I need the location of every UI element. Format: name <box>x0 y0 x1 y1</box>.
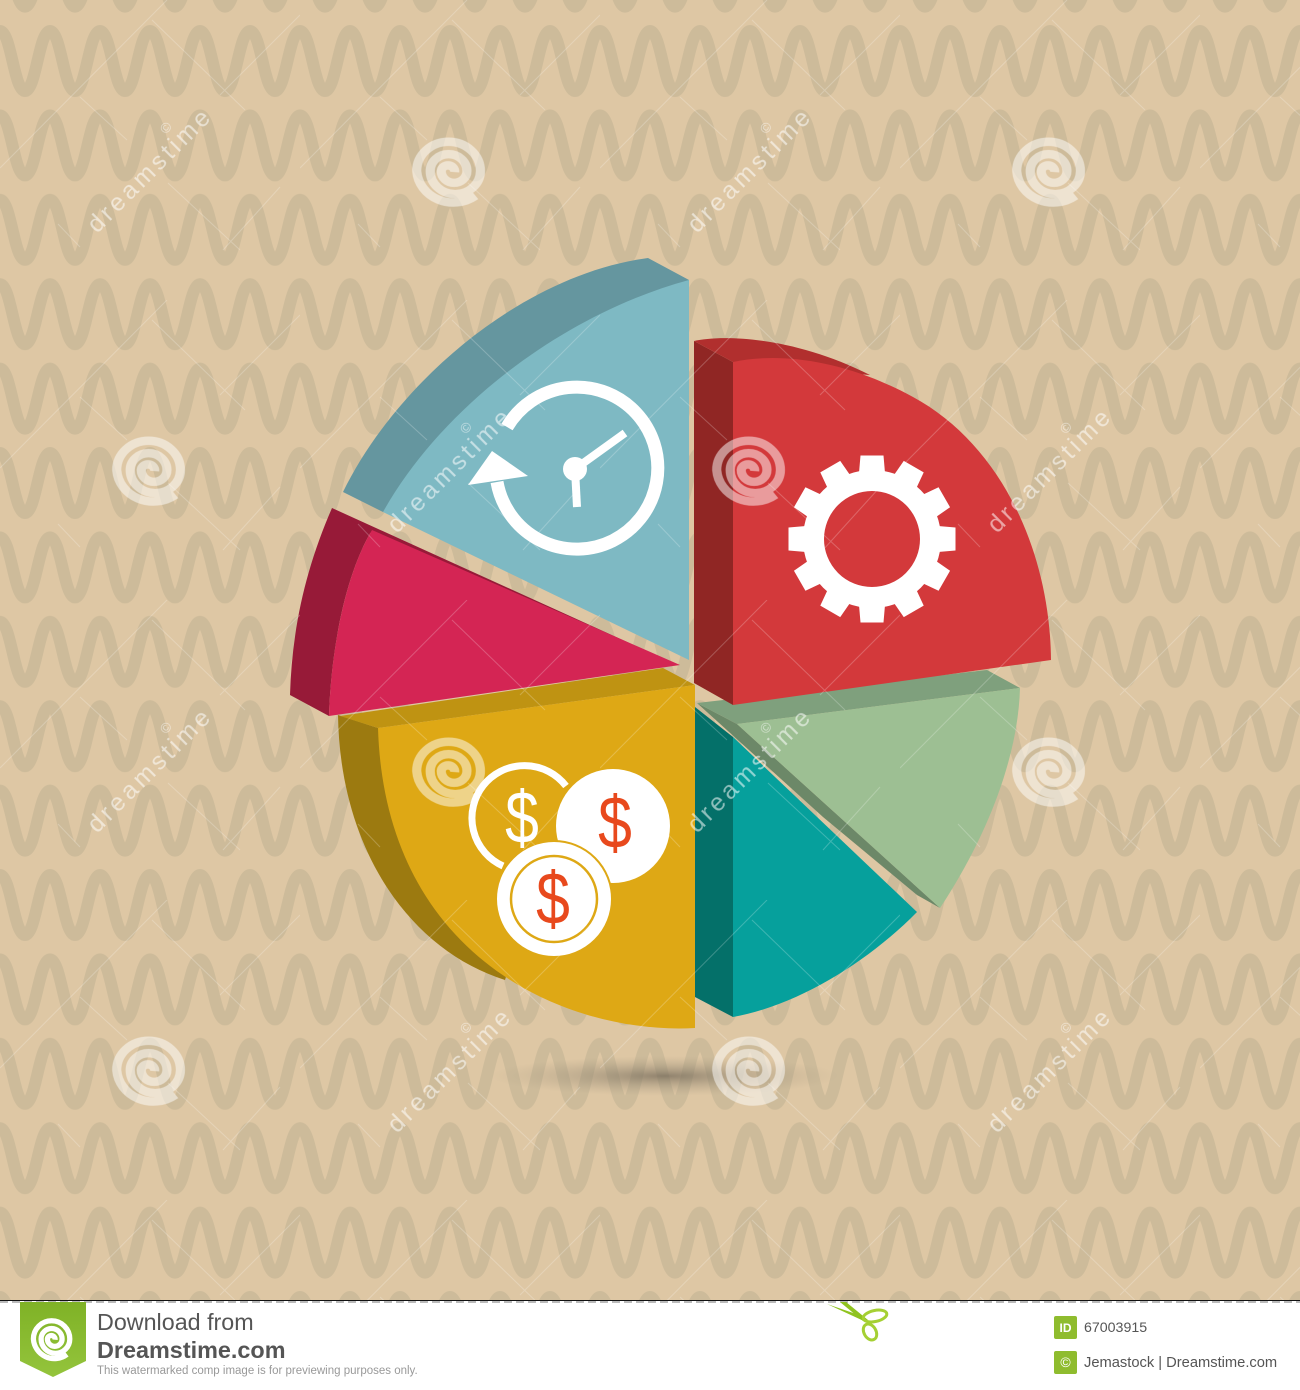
watermark text: dreamstime <box>682 702 818 838</box>
slice: blue clock <box>343 258 689 660</box>
watermark text: dreamstime <box>382 1002 518 1138</box>
watermark text: dreamstime <box>982 1002 1118 1138</box>
watermark text: dreamstime <box>682 102 818 238</box>
pie shadow <box>490 1056 840 1096</box>
disclaimer: This watermarked comp image is for previewing purposes only. <box>97 1365 418 1377</box>
watermark text: © <box>156 118 175 137</box>
watermark text: © <box>1056 418 1075 437</box>
site name: Dreamstime.com <box>97 1337 286 1363</box>
watermark text: © <box>1056 1018 1075 1037</box>
author credit: Jemastock | Dreamstime.com <box>1084 1355 1277 1371</box>
icon: coins: $ <box>598 782 632 864</box>
copyright badge <box>1054 1351 1077 1374</box>
watermark text: © <box>456 1018 475 1037</box>
pie chart <box>290 258 1051 1028</box>
id badge: ID <box>1060 1321 1072 1335</box>
slice: teal <box>695 707 917 1017</box>
watermark text: © <box>156 718 175 737</box>
icon: coins <box>472 766 670 957</box>
watermark text: © <box>756 118 775 137</box>
watermark text: dreamstime <box>382 402 518 538</box>
watermark text: © <box>456 418 475 437</box>
icon: scissors <box>827 1302 888 1342</box>
watermark text <box>72 92 1118 1138</box>
copyright badge: © <box>1060 1354 1071 1370</box>
slice: crimson <box>290 508 680 716</box>
slice: red gear <box>694 338 1051 705</box>
watermark spirals <box>117 142 1080 1102</box>
id badge <box>1054 1316 1077 1339</box>
icon: clock <box>468 387 658 549</box>
watermark text: dreamstime <box>82 702 218 838</box>
footer <box>0 1300 1300 1390</box>
download heading: Download from <box>97 1309 254 1335</box>
watermark text: © <box>756 718 775 737</box>
slice: gold coins <box>338 668 695 1028</box>
id number: 67003915 <box>1084 1320 1147 1336</box>
slice: green <box>697 670 1020 908</box>
icon: coins: $ <box>505 777 539 859</box>
watermark text: dreamstime <box>82 102 218 238</box>
icon: gear <box>788 456 956 622</box>
watermark text: dreamstime <box>982 402 1118 538</box>
icon: coins: $ <box>536 858 570 940</box>
icon: green badge <box>20 1302 86 1377</box>
